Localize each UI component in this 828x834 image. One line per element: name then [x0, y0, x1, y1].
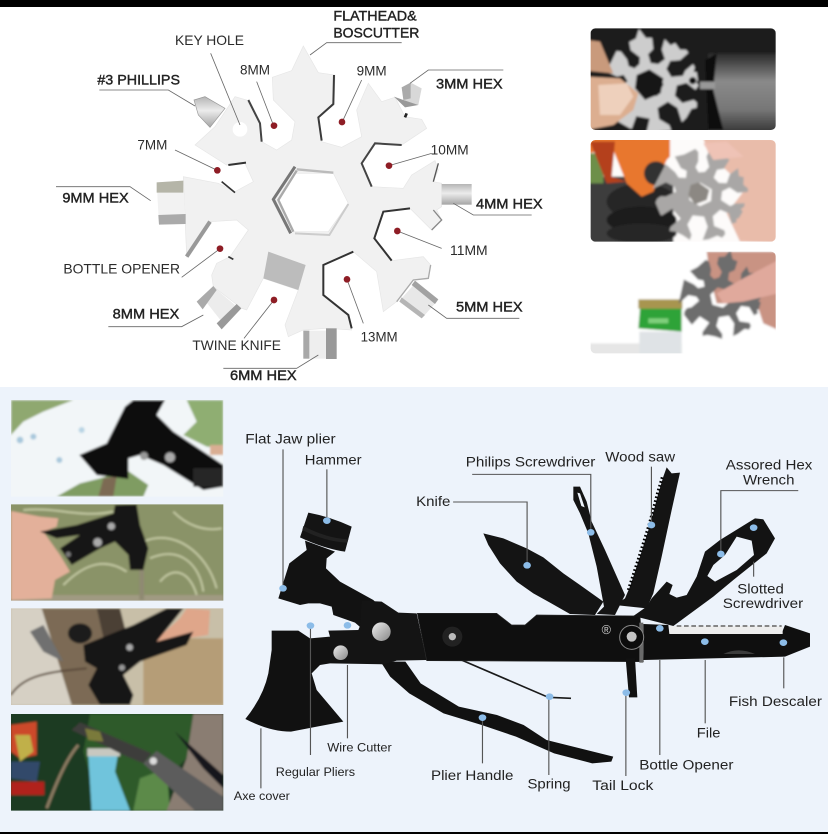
descaler groove — [723, 650, 755, 654]
wire cutter rivet — [333, 645, 348, 660]
label: wire cutter — [327, 622, 392, 754]
pivot rivet — [372, 622, 391, 641]
label: 3mm hex — [410, 70, 503, 91]
label: hammer — [305, 453, 362, 524]
label: spring: Spring — [527, 776, 571, 792]
label: philips screwdriver — [466, 455, 595, 536]
label: flathead and boscutter: FLATHEAD& — [333, 8, 417, 24]
label: twine knife — [192, 297, 281, 353]
handle screw — [442, 627, 462, 647]
label: 5mm hex: 5MM HEX — [456, 299, 523, 315]
label: fish descaler — [729, 639, 822, 710]
saw teeth — [628, 476, 663, 590]
label: knife — [416, 494, 531, 569]
label: 11mm — [394, 228, 488, 258]
label: slotted screwdriver — [723, 524, 803, 612]
label: spring — [527, 693, 571, 792]
background: pale blue lower panel — [0, 387, 828, 832]
label: key hole — [175, 33, 244, 125]
label: slotted screwdriver: Slotted — [737, 581, 784, 597]
label: 8mm hex: 8MM HEX — [113, 305, 180, 321]
label: 10mm: 10MM — [431, 143, 469, 158]
label: wood saw: Wood saw — [605, 449, 675, 465]
bottom black band — [0, 832, 828, 834]
label: 11mm: 11MM — [450, 243, 488, 258]
label: flat jaw plier: Flat Jaw plier — [245, 431, 336, 447]
spring wire — [460, 659, 571, 698]
label: flat jaw plier — [245, 431, 336, 592]
hammer neck and flat jaw — [278, 541, 380, 628]
label: 8mm hex — [108, 305, 203, 327]
icon: 4mm hex bit — [442, 184, 472, 205]
left end of the tool: axe, hammer and pliers — [245, 513, 427, 732]
hammer head — [300, 513, 352, 552]
label: regular pliers — [276, 622, 355, 779]
icon: 5mm hex bit — [399, 281, 438, 318]
background: white upper section — [0, 0, 828, 387]
hex wrench and bottle opener arm — [633, 518, 775, 626]
hinge edge — [639, 623, 643, 663]
icon: 3mm hex bit — [394, 83, 422, 107]
label: file: File — [697, 725, 720, 741]
icon: 6mm hex bit — [303, 328, 337, 359]
label: assored hex wrench — [717, 458, 813, 557]
label: 10mm — [386, 143, 469, 169]
knife blade — [483, 533, 603, 615]
label: bottle opener — [63, 245, 223, 277]
label: flathead and boscutter — [310, 8, 419, 55]
photo: tightening a bolt on a cylinder — [590, 28, 776, 130]
icon: 9mm hex bit — [157, 181, 186, 225]
photo: hammering a nail in grass — [7, 500, 227, 603]
label: 6mm hex: 6MM HEX — [230, 367, 297, 383]
icon: #3 phillips bit — [194, 97, 225, 127]
label: bottle opener — [639, 625, 733, 773]
label: file — [697, 638, 720, 741]
label: key hole: KEY HOLE — [175, 33, 244, 48]
label: 4mm hex: 4MM HEX — [476, 195, 543, 211]
label: wood saw — [605, 449, 675, 528]
photo: opening a green bottle — [590, 252, 776, 354]
photo: opening a blue bottle among leaves — [7, 710, 227, 813]
label: philips screwdriver: Philips Screwdriver — [466, 455, 595, 470]
label: 8mm: 8MM — [240, 63, 270, 78]
label: 5mm hex — [428, 299, 523, 318]
label: tail lock — [592, 689, 654, 794]
tail lock — [620, 625, 644, 697]
label: 9mm hex: 9MM HEX — [62, 189, 129, 205]
label: 9mm: 9MM — [357, 63, 387, 78]
label: axe cover — [234, 728, 291, 803]
file teeth — [669, 626, 783, 634]
label: axe cover: Axe cover — [234, 789, 291, 803]
label: 4mm hex — [453, 195, 543, 215]
label: fish descaler: Fish Descaler — [729, 694, 822, 710]
axe head — [245, 631, 343, 732]
file and fish descaler blade — [643, 624, 810, 660]
notch edge shadows — [187, 75, 442, 328]
label: #3 phillips — [97, 71, 195, 106]
photo column: hammer multi-tool in use — [7, 397, 227, 813]
icon: 8mm hex bit — [197, 286, 241, 329]
label: bottle opener: BOTTLE OPENER — [63, 261, 180, 276]
photo: loosening a nut with orange tool — [590, 140, 776, 242]
label: 9mm — [339, 63, 387, 125]
label: regular pliers: Regular Pliers — [276, 765, 355, 779]
photo: cutting wire on a post — [7, 605, 227, 708]
label: flathead and boscutter: BOSCUTTER — [333, 24, 419, 40]
label: twine knife: TWINE KNIFE — [192, 338, 281, 353]
label: 8mm — [240, 63, 277, 129]
hammer multi-tool drawing — [245, 467, 810, 763]
label: plier handle: Plier Handle — [431, 768, 513, 784]
main handle with finger notch — [417, 613, 643, 662]
pivot plate — [328, 601, 427, 664]
label: assored hex wrench: Assored Hex — [726, 458, 813, 473]
label: hammer: Hammer — [305, 453, 362, 468]
label: wire cutter: Wire Cutter — [327, 740, 392, 754]
label: bottle opener: Bottle Opener — [639, 757, 733, 773]
snowflake body — [183, 46, 442, 337]
label: #3 phillips: #3 PHILLIPS — [97, 71, 180, 87]
icon: twine knife blade — [263, 252, 306, 290]
photo: axe chopping a branch — [7, 397, 227, 500]
registered mark: ® — [602, 623, 612, 637]
label: 13mm — [344, 276, 398, 344]
label: assored hex wrench: Wrench — [743, 473, 794, 488]
label: 3mm hex: 3MM HEX — [436, 75, 503, 91]
label: 7mm — [137, 137, 221, 174]
top black band — [0, 0, 828, 7]
key hole — [233, 122, 247, 137]
snowflake multi-tool diagram — [56, 8, 543, 383]
centre hexagon hole — [273, 167, 348, 235]
label: 13mm: 13MM — [361, 329, 398, 344]
label: knife: Knife — [416, 494, 450, 510]
photo column: snowflake tool in use — [587, 22, 780, 357]
label: 7mm: 7MM — [137, 137, 167, 152]
label: 9mm hex — [56, 187, 151, 205]
label: 6mm hex — [223, 355, 318, 383]
plier handle — [381, 662, 613, 763]
philips screwdriver — [573, 487, 625, 615]
wood saw — [615, 467, 680, 608]
label: slotted screwdriver: Screwdriver — [723, 596, 803, 612]
label: plier handle — [431, 714, 513, 784]
multi-tool labels — [234, 431, 822, 803]
label: tail lock: Tail Lock — [592, 778, 654, 794]
